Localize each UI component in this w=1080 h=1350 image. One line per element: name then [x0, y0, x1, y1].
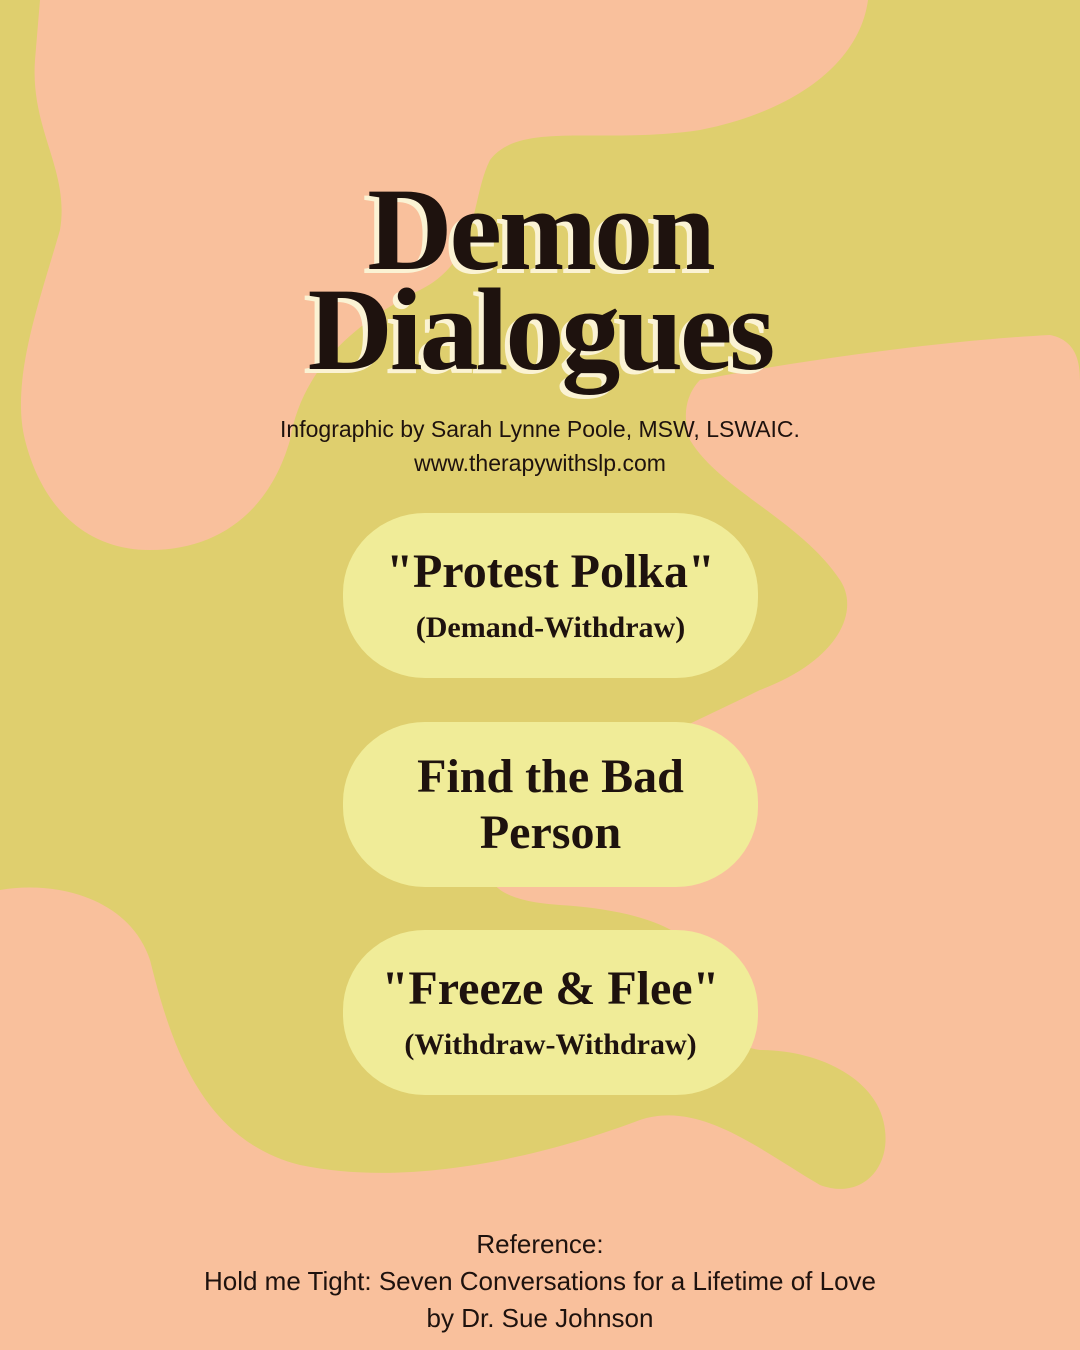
pill: Find the Bad Person: Find the Bad: [417, 750, 684, 802]
pill: Freeze & Flee: [343, 930, 758, 1095]
reference text: by Dr. Sue Johnson: [427, 1303, 653, 1333]
title: Demon: [367, 164, 713, 295]
pill: Freeze & Flee: (Withdraw-Withdraw): [404, 1028, 697, 1060]
pill: Find the Bad Person: [343, 722, 758, 887]
pill: Protest Polka: [343, 513, 758, 678]
pill: Protest Polka: "Protest Polka": [386, 544, 715, 598]
subtitle: author and website: www.therapywithslp.com: [414, 450, 666, 476]
subtitle: author and website: [280, 416, 800, 476]
pill: Freeze & Flee: "Freeze & Flee": [382, 962, 719, 1014]
title: Dialogues: [308, 264, 772, 395]
subtitle: author and website: Infographic by Sarah Lynne Poole, MSW, LSWAIC.: [280, 416, 800, 442]
pill: Protest Polka: (Demand-Withdraw): [416, 610, 685, 644]
pill: Find the Bad Person: Person: [480, 806, 621, 858]
reference text: Reference:: [476, 1229, 604, 1259]
reference text: Hold me Tight: Seven Conversations for a Lifetime of Love: [204, 1266, 876, 1296]
title: [304, 164, 772, 399]
reference text: [204, 1229, 876, 1333]
